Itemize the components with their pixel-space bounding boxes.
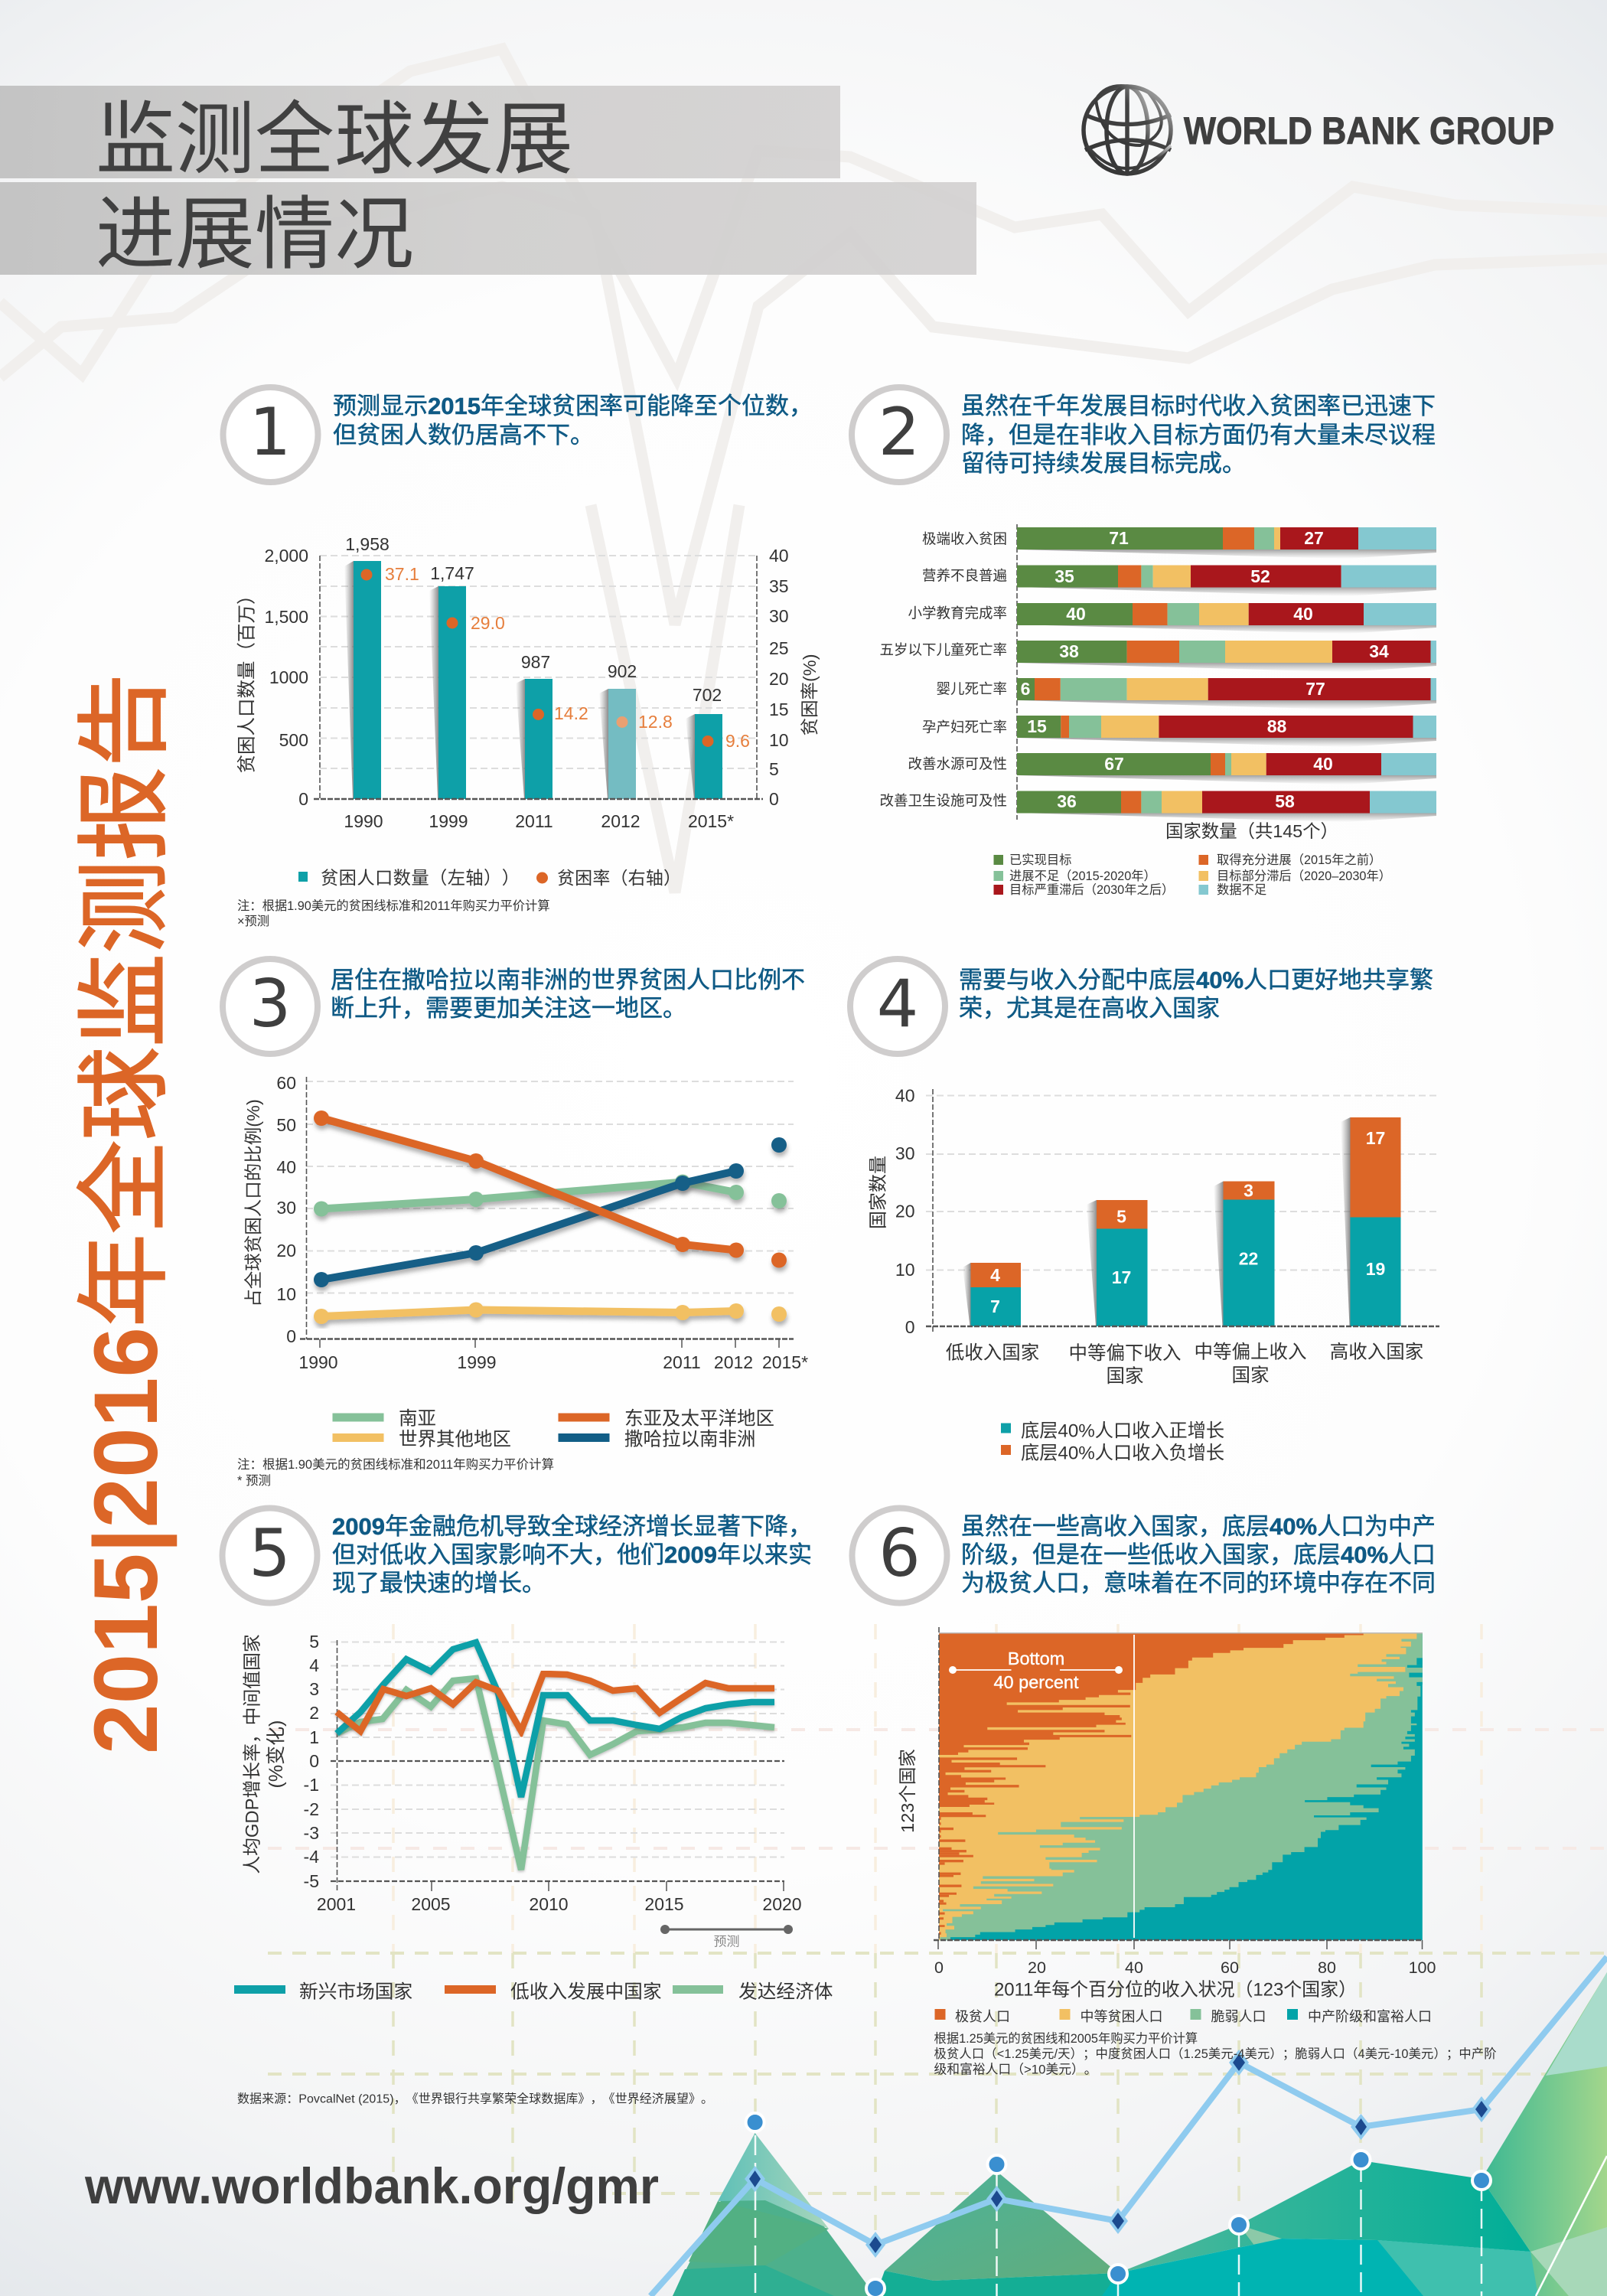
line chart: per capita GDP growth: 1 — [309, 1727, 319, 1747]
line chart: per capita GDP growth: 2020 — [762, 1894, 802, 1914]
bar chart: poor population and poverty rate: 35 — [769, 576, 789, 596]
side title: 2015|2016年全球监测报告 — [73, 673, 178, 1754]
stacked bar chart: countries by income group: 7 — [990, 1296, 1000, 1316]
heading 6: 虽然在一些高收入国家，底层 — [961, 1512, 1270, 1540]
bar chart: poor population and poverty rate: 0 — [298, 789, 308, 809]
legend 4 — [1001, 1420, 1224, 1463]
line chart: share of global poor: 1999 — [457, 1352, 497, 1372]
note 1: ×预测 — [237, 915, 269, 928]
stacked bar chart: countries by income group: 国家 — [1107, 1365, 1143, 1387]
legend 5: 低收入发展中国家 — [510, 1981, 662, 2002]
stacked area chart: 123 countries: 40 — [1125, 1958, 1143, 1977]
stacked bars: MDG targets: 营养不良普遍 — [922, 568, 1007, 583]
number badge 3 — [223, 959, 318, 1054]
bar chart: poor population and poverty rate: 12.8 — [638, 712, 673, 732]
note 6 — [934, 2031, 1497, 2077]
stacked bars: MDG targets: 小学教育完成率 — [908, 605, 1007, 621]
stacked area chart: 123 countries: 2011年每个百分位的收入状况（123个国家） — [994, 1979, 1357, 2001]
bar chart: poor population and poverty rate: 2,000 — [264, 546, 308, 566]
stacked bars: MDG targets: 五岁以下儿童死亡率 — [879, 641, 1007, 658]
legend 2: 目标部分滞后（2020–2030年） — [1217, 869, 1391, 883]
stacked bar chart: countries by income group: 19 — [1366, 1259, 1385, 1279]
bar chart: poor population and poverty rate: 987 — [521, 652, 550, 672]
stacked bars: MDG targets: 孕产妇死亡率 — [922, 719, 1007, 735]
heading 6: 40%人口为中产 — [1270, 1512, 1436, 1540]
legend 1: 贫困率（右轴） — [557, 868, 681, 888]
bar chart: poor population and poverty rate: 500 — [279, 730, 308, 750]
bar chart: poor population and poverty rate: 9.6 — [725, 731, 750, 751]
note 6: 极贫人口（<1.25美元/天）；中度贫困人口（1.25美元-4美元）；脆弱人口（4美元-10美元）；中产阶 — [934, 2047, 1497, 2061]
line chart: per capita GDP growth: -2 — [304, 1799, 319, 1819]
data source: 数据来源：PovcalNet (2015)，《世界银行共享繁荣全球数据库》，《世界经济展望》。 — [237, 2092, 713, 2106]
line chart: share of global poor: 占全球贫困人口的比例(%) — [243, 1099, 263, 1307]
bar chart: poor population and poverty rate: 1,747 — [430, 563, 474, 583]
legend 2: 进展不足（2015-2020年） — [1009, 869, 1156, 883]
line chart: per capita GDP growth: 5 — [309, 1632, 319, 1652]
line chart: per capita GDP growth: -5 — [304, 1871, 319, 1891]
forecast range marker — [660, 1925, 793, 1949]
panel 1: poverty headcount and rate — [223, 387, 820, 928]
panel 3: regional share of the poor — [223, 959, 808, 1488]
stacked bars: MDG targets: 35 — [1054, 566, 1074, 586]
website url: www.worldbank.org/gmr — [84, 2157, 659, 2214]
bar chart: poor population and poverty rate: 10 — [769, 730, 789, 750]
stacked bar chart: countries by income group: 17 — [1366, 1128, 1385, 1148]
stacked area chart: 123 countries: 123个国家 — [898, 1749, 918, 1833]
line chart: per capita GDP growth — [242, 1632, 802, 1914]
stacked area chart: 123 countries: 60 — [1221, 1958, 1239, 1977]
line chart: per capita GDP growth: 0 — [309, 1751, 319, 1771]
stacked bar chart: countries by income group: 中等偏上收入 — [1194, 1341, 1307, 1362]
legend 3: 撒哈拉以南非洲 — [624, 1428, 756, 1450]
bar chart: poor population and poverty rate: 0 — [769, 789, 779, 809]
note 6: 级和富裕人口（>10美元）。 — [934, 2062, 1097, 2077]
note 3: * 预测 — [237, 1473, 271, 1488]
heading 5: 现了最快速的增长。 — [332, 1569, 546, 1596]
line chart: per capita GDP growth: 2001 — [317, 1894, 356, 1914]
heading 4: 荣，尤其是在高收入国家 — [959, 995, 1220, 1021]
legend 3: 东亚及太平洋地区 — [624, 1408, 774, 1430]
bar chart: poor population and poverty rate: 30 — [769, 606, 789, 626]
line chart: share of global poor: 2015* — [762, 1352, 808, 1372]
legend 1: 贫困人口数量（左轴）） — [321, 868, 520, 888]
bar chart: poor population and poverty rate: 2012 — [601, 811, 641, 831]
stacked area chart: 123 countries: 100 — [1409, 1958, 1436, 1977]
legend 4: 底层40%人口收入负增长 — [1021, 1443, 1224, 1463]
heading 1: 预测显示 — [333, 392, 428, 419]
heading 4: 需要与收入分配中底层 — [959, 966, 1196, 993]
bar chart: poor population and poverty rate: 15 — [769, 700, 789, 719]
line chart: per capita GDP growth: 3 — [309, 1679, 319, 1699]
bar chart: poor population and poverty rate: 1,958 — [345, 534, 390, 554]
stacked bars: MDG targets: 40 — [1293, 604, 1313, 624]
legend 6: 脆弱人口 — [1211, 2009, 1266, 2024]
stacked bar chart: countries by income group: 中等偏下收入 — [1068, 1342, 1182, 1364]
legend 1 — [298, 868, 681, 888]
heading 5: 2009年以来实 — [664, 1541, 812, 1567]
bar chart: poor population and poverty rate: 37.1 — [385, 564, 419, 584]
number badge 1: 1 — [249, 394, 291, 471]
stacked bars: MDG targets: 极端收入贫困 — [922, 531, 1007, 546]
stacked bar chart: countries by income group: 20 — [895, 1202, 915, 1221]
bar chart: poor population and poverty rate: 20 — [769, 669, 789, 689]
stacked bar chart: countries by income group: 10 — [895, 1260, 915, 1280]
title banner: 监测全球发展 — [96, 96, 573, 184]
stacked bars: MDG targets: 34 — [1369, 641, 1389, 661]
number badge 6: 6 — [878, 1515, 921, 1592]
note 1 — [237, 899, 550, 928]
stacked bar chart: countries by income group: 国家 — [1232, 1365, 1269, 1386]
stacked bars: MDG targets: 15 — [1027, 716, 1047, 736]
line chart: per capita GDP growth: 2 — [309, 1703, 319, 1723]
stacked bars: MDG targets: 77 — [1305, 679, 1325, 699]
note 1: 注：根据1.90美元的贫困线标准和2011年购买力平价计算 — [237, 899, 550, 913]
line chart: per capita GDP growth: -1 — [304, 1775, 319, 1795]
bar chart: poor population and poverty rate: 贫困人口数量（百万） — [236, 586, 257, 773]
heading 4: 40%人口更好地共享繁 — [1196, 966, 1433, 993]
bar chart: poor population and poverty rate: 2015* — [688, 811, 734, 831]
line chart: share of global poor: 2011 — [663, 1352, 701, 1372]
legend 5: 新兴市场国家 — [299, 1981, 412, 2002]
stacked bars: MDG targets: 40 — [1313, 754, 1333, 774]
stacked bars: MDG targets: 6 — [1021, 679, 1030, 699]
legend 2: 已实现目标 — [1009, 853, 1071, 867]
note 6: 根据1.25美元的贫困线和2005年购买力平价计算 — [934, 2031, 1198, 2046]
line chart: per capita GDP growth: 2010 — [529, 1894, 569, 1914]
line chart: share of global poor: 20 — [276, 1241, 296, 1261]
logo: World Bank Group: WORLD BANK GROUP — [1184, 109, 1554, 152]
stacked bar chart: countries by income group: 17 — [1112, 1267, 1131, 1287]
stacked area chart: 123 countries: 80 — [1318, 1958, 1336, 1977]
stacked bars: MDG targets: 71 — [1109, 528, 1129, 548]
heading 1: 2015年全球贫困率可能降至个位数， — [428, 392, 813, 419]
line chart: per capita GDP growth: -3 — [304, 1823, 319, 1843]
stacked bars: MDG targets: 52 — [1250, 566, 1270, 586]
number badge 5 — [222, 1508, 317, 1603]
heading 6: 40%人口 — [1341, 1541, 1436, 1567]
legend 2: 目标严重滞后（2030年之后） — [1009, 883, 1174, 897]
heading 1: 但贫困人数仍居高不下。 — [333, 421, 594, 448]
stacked area chart: 123 countries: 0 — [934, 1958, 944, 1977]
stacked bar chart: countries by income group: 40 — [895, 1085, 915, 1105]
bar chart: poor population and poverty rate: 2011 — [515, 811, 553, 831]
legend 6: 极贫人口 — [955, 2009, 1010, 2024]
line chart: share of global poor: 1990 — [298, 1352, 338, 1372]
stacked area chart: 123 countries: 40 percent — [993, 1672, 1079, 1692]
number badge 5: 5 — [249, 1515, 291, 1592]
note 3 — [237, 1457, 554, 1488]
legend 4: 底层40%人口收入正增长 — [1021, 1420, 1224, 1442]
heading 6: 为极贫人口，意味着在不同的环境中存在不同 — [961, 1569, 1436, 1596]
panel 4: bottom 40 percent — [850, 959, 1439, 1463]
stacked bar chart: countries by income group: 22 — [1239, 1249, 1258, 1269]
legend 6: 中产阶级和富裕人口 — [1308, 2009, 1432, 2024]
stacked bars: MDG targets: 36 — [1057, 791, 1077, 811]
line chart: share of global poor: 2012 — [714, 1352, 753, 1372]
bar chart: poor population and poverty rate: 1,500 — [264, 607, 308, 627]
bar chart: poor population and poverty rate: 贫困率(%) — [800, 654, 820, 736]
stacked bar chart: countries by income group: 30 — [895, 1143, 915, 1163]
heading 2: 虽然在千年发展目标时代收入贫困率已迅速下 — [961, 392, 1436, 419]
number badge 6 — [852, 1508, 947, 1603]
line chart: per capita GDP growth: 2005 — [411, 1894, 451, 1914]
stacked bar chart: countries by income group — [868, 1085, 1439, 1387]
line chart: share of global poor: 30 — [276, 1198, 296, 1218]
bar chart: poor population and poverty rate: 702 — [693, 685, 722, 705]
legend 3: 南亚 — [399, 1408, 436, 1430]
number badge 2: 2 — [878, 394, 920, 471]
legend 2: 取得充分进展（2015年之前） — [1217, 853, 1381, 867]
line chart: share of global poor: 40 — [276, 1157, 296, 1177]
bar chart: poor population and poverty rate: 902 — [608, 661, 637, 681]
legend 6: 中等贫困人口 — [1081, 2009, 1163, 2024]
stacked bar chart: countries by income group: 4 — [990, 1265, 1000, 1285]
heading 3: 断上升，需要更加关注这一地区。 — [331, 995, 686, 1021]
panel 5: GDP growth — [222, 1508, 833, 2002]
stacked bar chart: countries by income group: 0 — [905, 1317, 915, 1337]
stacked bars: MDG targets: 改善卫生设施可及性 — [879, 793, 1007, 808]
stacked bars: MDG targets: 88 — [1267, 716, 1286, 736]
line chart: share of global poor: 60 — [276, 1073, 296, 1093]
bar chart: poor population and poverty rate: 1000 — [269, 667, 308, 687]
bar chart: poor population and poverty rate: 40 — [769, 546, 789, 566]
stacked bar chart: countries by income group: 低收入国家 — [946, 1342, 1039, 1364]
number badge 4 — [850, 959, 945, 1054]
number badge 2 — [852, 387, 947, 482]
panel 2: MDG progress — [852, 387, 1436, 897]
bar chart: poor population and poverty rate: 25 — [769, 638, 789, 658]
line chart: per capita GDP growth: -4 — [304, 1847, 319, 1867]
heading 2: 留待可持续发展目标完成。 — [961, 450, 1246, 476]
bar chart: poor population and poverty rate: 1990 — [344, 811, 383, 831]
legend 3: 世界其他地区 — [399, 1428, 511, 1450]
line chart: share of global poor — [243, 1073, 808, 1372]
number badge 1 — [223, 387, 318, 482]
legend 3 — [332, 1408, 774, 1450]
legend 6 — [935, 2009, 1432, 2024]
line chart: share of global poor: 50 — [276, 1115, 296, 1135]
logo: World Bank Group — [1084, 86, 1554, 174]
stacked area chart: 123 countries — [898, 1627, 1436, 2001]
legend 2: 数据不足 — [1217, 883, 1266, 897]
bar chart: poor population and poverty rate — [236, 534, 820, 831]
heading 2: 降，但是在非收入目标方面仍有大量未尽议程 — [961, 421, 1436, 448]
bottom decoration: faceted mountains and lines — [650, 1957, 1607, 2296]
stacked bars: MDG targets: 40 — [1066, 604, 1086, 624]
stacked area chart: 123 countries: Bottom — [1008, 1649, 1064, 1668]
stacked bar chart: countries by income group: 高收入国家 — [1330, 1341, 1423, 1362]
note 3: 注：根据1.90美元的贫困线标准和2011年购买力平价计算 — [237, 1457, 554, 1472]
title banner — [0, 86, 976, 279]
stacked bars: MDG targets: 27 — [1304, 528, 1324, 548]
legend 5 — [234, 1981, 833, 2002]
heading 5: 但对低收入国家影响不大，他们 — [332, 1541, 664, 1567]
stacked bars: MDG targets: 改善水源可及性 — [908, 756, 1007, 771]
stacked area chart: 123 countries: 20 — [1028, 1958, 1046, 1977]
bar chart: poor population and poverty rate: 5 — [769, 759, 779, 779]
legend 2 — [993, 853, 1391, 897]
stacked bars: MDG targets: 58 — [1275, 791, 1295, 811]
bar chart: poor population and poverty rate: 29.0 — [471, 613, 505, 633]
legend 5: 发达经济体 — [738, 1981, 833, 2002]
title banner: 进展情况 — [96, 191, 414, 279]
stacked bars: MDG targets: 38 — [1059, 641, 1079, 661]
stacked bars: MDG targets: 婴儿死亡率 — [936, 681, 1007, 696]
bar chart: poor population and poverty rate: 14.2 — [554, 703, 588, 723]
heading 6: 阶级，但是在一些低收入国家，底层 — [961, 1541, 1341, 1567]
panel 6: income distribution by percentile — [852, 1508, 1497, 2077]
forecast range marker: 预测 — [713, 1935, 739, 1949]
number badge 4: 4 — [877, 966, 918, 1042]
line chart: per capita GDP growth: 2015 — [644, 1894, 684, 1914]
number badge 3: 3 — [249, 966, 291, 1042]
stacked bar chart: countries by income group: 5 — [1116, 1206, 1126, 1226]
line chart: share of global poor: 10 — [276, 1284, 296, 1304]
heading 3: 居住在撒哈拉以南非洲的世界贫困人口比例不 — [331, 966, 805, 993]
line chart: share of global poor: 0 — [286, 1326, 296, 1346]
bar chart: poor population and poverty rate: 1999 — [429, 811, 468, 831]
line chart: per capita GDP growth: (%变化) — [266, 1720, 287, 1788]
stacked bars: MDG targets: 67 — [1104, 754, 1124, 774]
line chart: per capita GDP growth: 4 — [309, 1655, 319, 1675]
line chart: per capita GDP growth: 人均GDP增长率，中间值国家 — [242, 1634, 263, 1874]
heading 5: 年金融危机导致全球经济增长显著下降， — [385, 1512, 812, 1540]
stacked bars: MDG targets — [879, 524, 1436, 841]
heading 5: 2009 — [332, 1512, 385, 1540]
stacked bar chart: countries by income group: 3 — [1244, 1180, 1253, 1200]
stacked bars: MDG targets: 国家数量（共145个） — [1165, 821, 1338, 841]
stacked bar chart: countries by income group: 国家数量 — [868, 1156, 889, 1229]
